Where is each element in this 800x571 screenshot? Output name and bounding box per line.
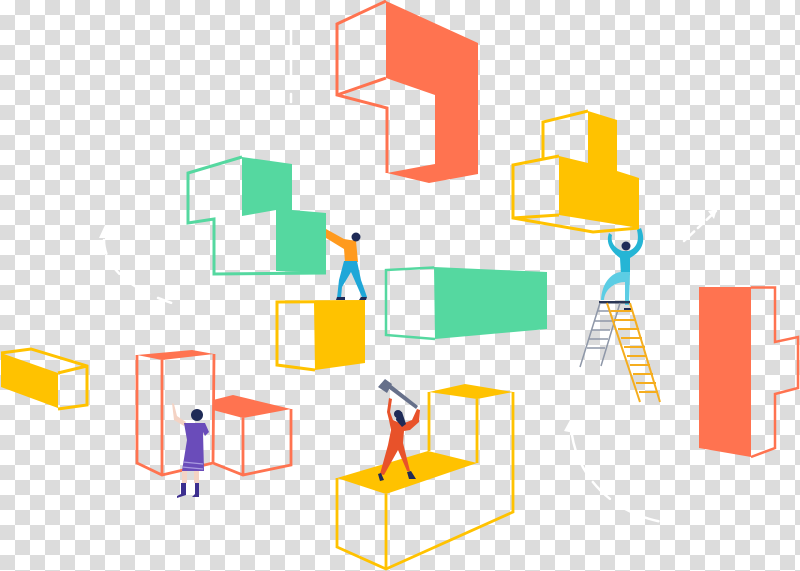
- dashed white arcs: [99, 28, 717, 522]
- figure: person on ladder holding yellow block: [580, 228, 660, 402]
- block: small yellow left: [1, 349, 87, 409]
- figure: man pushing green block: [326, 229, 367, 300]
- block: yellow bottom stairs: [337, 384, 513, 569]
- block: orange right: [699, 287, 798, 457]
- block: orange top: [337, 1, 478, 183]
- block: green centre bar: [386, 267, 547, 339]
- figure: woman in purple dress: [172, 403, 209, 498]
- block: yellow centre cube: [277, 302, 365, 370]
- block: green left: [188, 157, 326, 274]
- block: orange tall box and cube: [137, 350, 291, 475]
- block: yellow top right: [513, 111, 639, 232]
- figure: woman in red with hammer: [378, 379, 420, 481]
